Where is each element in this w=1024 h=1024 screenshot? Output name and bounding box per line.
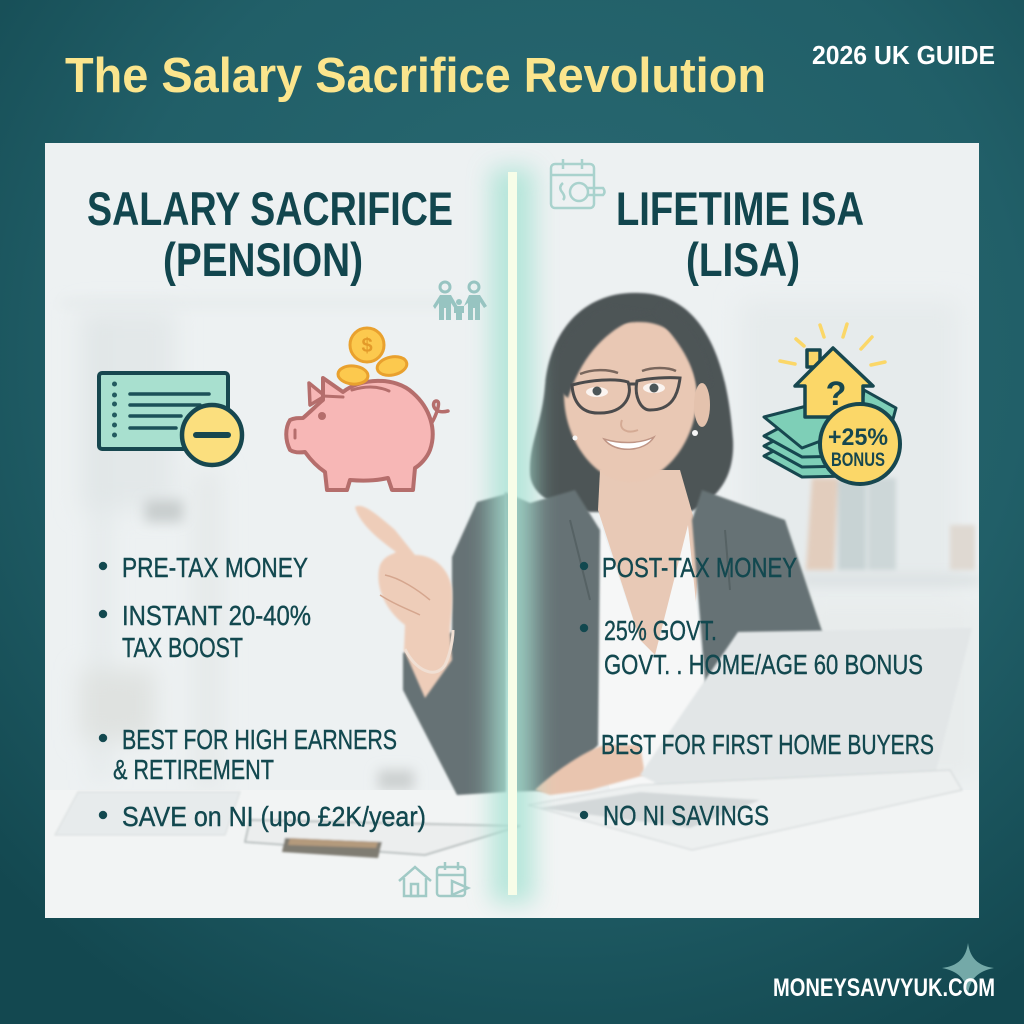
glow of divider	[491, 168, 534, 903]
smile	[604, 437, 654, 449]
icon: piggy bank with coins: $	[361, 335, 373, 357]
left column bullet list	[99, 552, 426, 832]
neck and chest	[598, 470, 698, 654]
heading: lifetime isa	[618, 192, 863, 286]
icon: sparkle	[942, 943, 994, 994]
heading: salary sacrifice: SALARY SACRIFICE	[87, 182, 453, 235]
right column bullet list: NO NI SAVINGS	[603, 800, 769, 831]
heading: salary sacrifice: (PENSION)	[163, 233, 363, 286]
right column bullet list	[580, 552, 934, 831]
icon: piggy bank with coins	[286, 328, 448, 490]
brows and nose	[580, 368, 676, 374]
laptop	[528, 628, 972, 850]
pointing hand	[355, 506, 452, 698]
icon: family	[433, 282, 487, 320]
presenter photo	[355, 293, 823, 795]
ears and earrings	[694, 383, 710, 427]
blazer	[505, 490, 823, 792]
hair	[530, 293, 733, 512]
desk	[374, 790, 418, 798]
blurred office backdrop	[60, 300, 980, 790]
title: The Salary Sacrifice Revolution	[65, 49, 766, 103]
left column bullet list: & RETIREMENT	[113, 754, 274, 785]
left column bullet list: INSTANT 20-40%	[122, 600, 311, 631]
eyes	[586, 387, 608, 397]
icon: home and calendar	[399, 862, 468, 896]
left column bullet list: PRE-TAX MONEY	[122, 552, 308, 583]
main comparison panel	[45, 143, 980, 918]
left hand on desk	[535, 745, 645, 795]
left column bullet list: BEST FOR HIGH EARNERS	[122, 724, 397, 755]
icon: calendar with key	[551, 159, 604, 208]
heading: lifetime isa: LIFETIME ISA	[616, 182, 864, 235]
heading: salary sacrifice	[88, 192, 452, 286]
blouse	[598, 525, 705, 790]
icon: house, cash and bonus badge: +25%	[828, 424, 888, 451]
icon: house, cash and bonus badge: BONUS	[831, 450, 885, 471]
guide label: 2026 UK GUIDE	[812, 40, 995, 70]
right column bullet list: GOVT. . HOME/AGE 60 BONUS	[604, 649, 923, 680]
heading: lifetime isa: (LISA)	[686, 233, 800, 286]
divider line	[508, 172, 517, 895]
face	[564, 322, 697, 482]
left column bullet list: TAX BOOST	[122, 632, 243, 663]
icon: house, cash and bonus badge: ?	[826, 375, 846, 413]
icon: payslip with minus	[99, 373, 242, 465]
icon: house, cash and bonus badge	[764, 324, 900, 484]
right column bullet list: 25% GOVT.	[604, 615, 717, 646]
bracelet	[405, 630, 453, 672]
tablet and clipboard on desk	[55, 792, 520, 858]
left column bullet list: SAVE on NI (upo £2K/year)	[122, 801, 426, 832]
glasses	[572, 378, 680, 413]
right column bullet list: POST-TAX MONEY	[602, 552, 797, 583]
